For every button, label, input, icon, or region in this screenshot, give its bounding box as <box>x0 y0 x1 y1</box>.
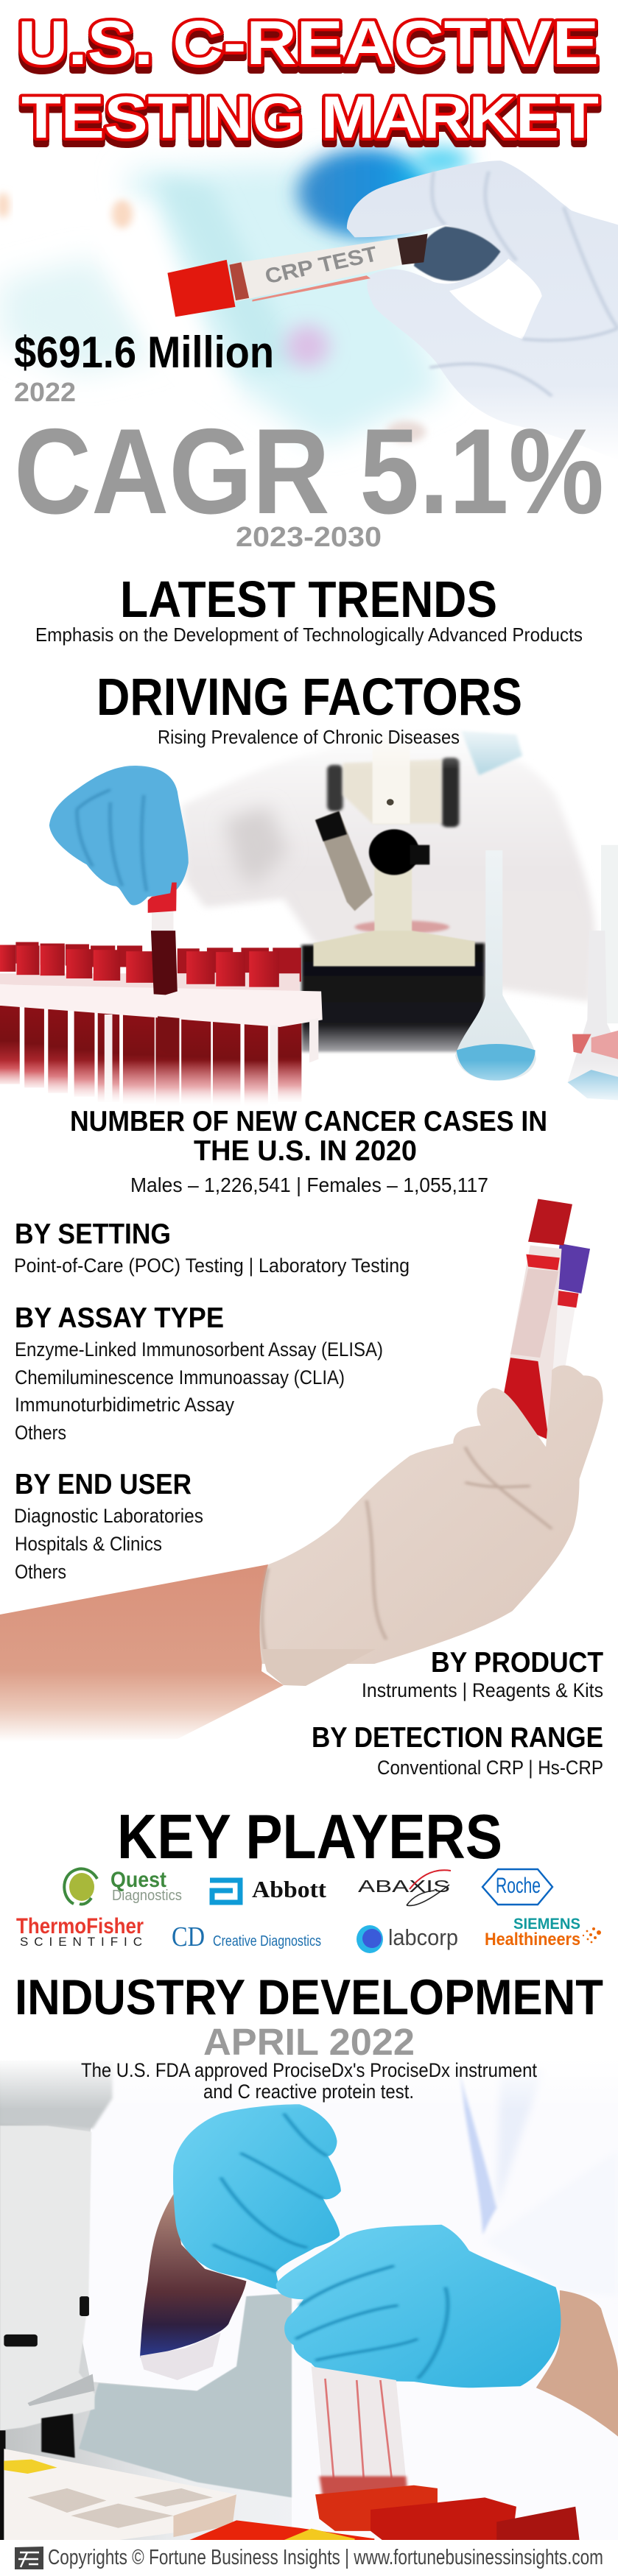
heading line 1: NUMBER OF NEW CANCER CASES IN <box>70 1106 547 1137</box>
white latex glove <box>347 160 618 460</box>
grey backdrop <box>79 2293 292 2497</box>
title line 1: U.S. C-REACTIVE <box>18 8 599 77</box>
bare arm <box>0 1564 284 1742</box>
title line 2: TESTING MARKET <box>21 85 599 151</box>
lower tube bodies <box>0 1006 301 1106</box>
logo: Siemens Healthineers <box>485 1916 601 1949</box>
logo: Labcorp <box>357 1924 458 1953</box>
market size value: $691.6 Million <box>14 328 274 377</box>
logo: Labcorp: labcorp <box>388 1924 458 1950</box>
footer background <box>0 2540 618 2576</box>
segment heading: BY ASSAY TYPE <box>15 1302 224 1334</box>
lower blue glove <box>276 2225 561 2388</box>
held tube <box>148 883 179 1054</box>
industry development text <box>81 2059 537 2103</box>
red and yellow reagent holders <box>189 2485 580 2540</box>
glove cuff end <box>261 1649 376 1686</box>
CAGR period: 2023-2030 <box>236 522 382 553</box>
test tube rack <box>0 883 323 1106</box>
segment: by assay type <box>15 1302 383 1444</box>
latest trends text: Emphasis on the Development of Technologically Advanced Products <box>35 624 583 646</box>
right forearm <box>536 2290 618 2437</box>
logo: Thermo Fisher Scientific: SCIENTIFIC <box>20 1935 142 1949</box>
upper blue glove <box>173 2104 341 2290</box>
blue glove hand <box>49 766 189 906</box>
logo: Quest Diagnostics: Diagnostics <box>112 1888 182 1904</box>
tube glass <box>0 973 300 995</box>
back row caps <box>15 942 301 981</box>
logo: Siemens Healthineers: Healthineers <box>485 1930 580 1949</box>
heading line 2: THE U.S. IN 2020 <box>194 1135 417 1167</box>
red cap tube <box>504 1199 572 1440</box>
item: others: Others <box>15 1422 66 1444</box>
pipettes <box>312 2366 408 2500</box>
item: ELISA: Enzyme-Linked Immunosorbent Assay (ELISA) <box>15 1338 383 1361</box>
segment: by product <box>362 1647 603 1701</box>
text line 1: The U.S. FDA approved ProciseDx's ProciseDx instrument <box>81 2059 537 2081</box>
blurred lab background <box>0 147 469 446</box>
item: immunoturbidimetric: Immunoturbidimetric Assay <box>15 1394 234 1416</box>
lab photo: gloved hands handling pipettes <box>0 2058 618 2540</box>
segment: by setting <box>14 1218 410 1277</box>
logo: Creative Diagnostics <box>172 1922 321 1952</box>
logo: Thermo Fisher Scientific <box>16 1914 144 1949</box>
blood tube with red cap and CRP TEST label <box>167 233 428 317</box>
item: diagnostic laboratories: Diagnostic Laboratories <box>14 1505 203 1527</box>
logo: Siemens Healthineers: SIEMENS <box>513 1916 580 1933</box>
market size year: 2022 <box>14 377 76 407</box>
latex glove <box>259 1366 603 1664</box>
logo: Quest Diagnostics: Quest <box>110 1868 166 1892</box>
heading: key players: KEY PLAYERS <box>117 1802 502 1872</box>
logo: Quest Diagnostics <box>64 1868 182 1905</box>
footer <box>0 2540 618 2576</box>
logo: Abbott: Abbott <box>252 1876 326 1902</box>
logo: Roche: Roche <box>496 1874 541 1898</box>
logo: Abaxis <box>358 1870 451 1905</box>
photo backdrop <box>0 2061 618 2540</box>
logo: Creative Diagnostics: Creative Diagnostics <box>213 1933 321 1949</box>
item: others: Others <box>15 1561 66 1583</box>
heading: driving factors: DRIVING FACTORS <box>96 668 522 727</box>
segment: by end user <box>14 1469 203 1583</box>
flasks <box>455 845 618 1100</box>
segment: by detection range <box>312 1722 603 1779</box>
segment items: Instruments | Reagents & Kits <box>362 1679 603 1701</box>
cancer case numbers: Males – 1,226,541 | Females – 1,055,117 <box>130 1174 488 1196</box>
logo: Abbott <box>210 1876 326 1902</box>
item: CLIA: Chemiluminescence Immunoassay (CLIA) <box>15 1366 345 1388</box>
front row caps <box>0 945 279 987</box>
purple cap tube <box>532 1243 590 1415</box>
item: hospitals: Hospitals & Clinics <box>15 1533 162 1555</box>
icon: Fortune Business Insights logo <box>15 2547 43 2569</box>
microscope at left <box>0 2061 113 2540</box>
lab photo: scientist, blood tube rack, microscope, flasks <box>0 730 618 1106</box>
rack shelf <box>0 984 323 1027</box>
segment heading: BY END USER <box>15 1469 192 1500</box>
text line 2: and C reactive protein test. <box>203 2081 414 2103</box>
sample tray <box>4 2449 236 2540</box>
photo top and bottom fades <box>0 718 618 1106</box>
lab coat <box>79 2061 618 2540</box>
top fade <box>0 2058 618 2109</box>
heading: latest trends: LATEST TRENDS <box>120 571 497 628</box>
segment heading: BY PRODUCT <box>431 1647 603 1679</box>
segment items: Point-of-Care (POC) Testing | Laboratory Testing <box>14 1255 410 1277</box>
hero panel: blurred lab photo with gloved hand holding CRP tube <box>0 147 618 460</box>
hand holding blood tubes <box>0 1199 603 1742</box>
microscope <box>301 738 485 1052</box>
lab coat <box>181 730 595 1002</box>
development date: APRIL 2022 <box>203 2021 415 2063</box>
logo: Creative Diagnostics: CD <box>172 1922 205 1952</box>
tube label text: CRP TEST <box>262 241 380 288</box>
segment heading: BY SETTING <box>15 1218 171 1250</box>
driving factors text: Rising Prevalence of Chronic Diseases <box>158 726 460 748</box>
logo: Roche <box>482 1869 552 1905</box>
cancer cases heading <box>70 1106 547 1167</box>
logo: Abaxis: ABAXIS <box>358 1877 450 1896</box>
logo: Thermo Fisher Scientific: ThermoFisher <box>16 1914 144 1938</box>
left forearm <box>140 2194 246 2357</box>
title <box>18 8 599 151</box>
key player logos <box>16 1868 601 1953</box>
